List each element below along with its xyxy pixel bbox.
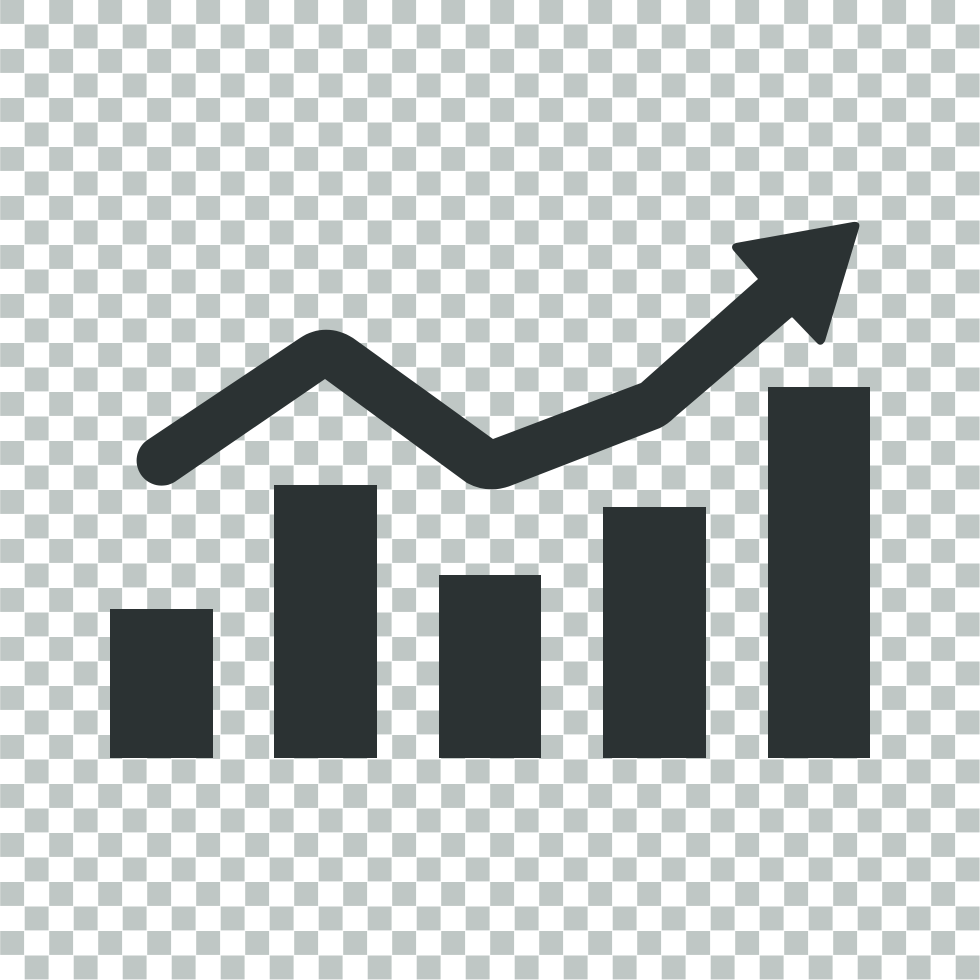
rising trend arrow <box>137 222 859 489</box>
bar 4 <box>603 507 706 758</box>
bar chart <box>110 387 870 758</box>
bar 1 <box>110 609 213 758</box>
bar 2 <box>274 485 377 758</box>
bar 3 <box>439 575 541 758</box>
bar 5 <box>768 387 870 758</box>
